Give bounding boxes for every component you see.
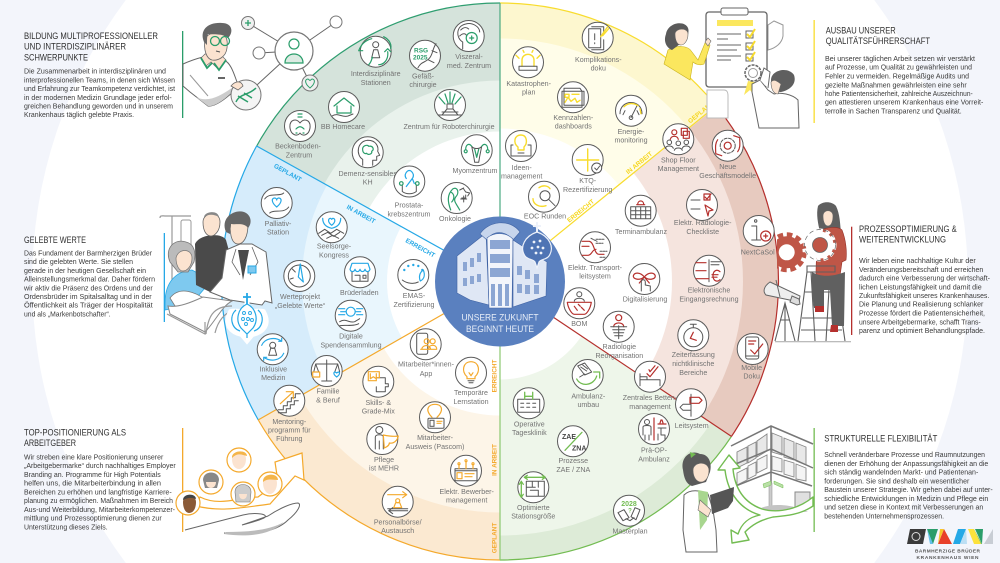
text block: helfen uns, die Mitarbeiterbindung in allen bbox=[24, 479, 161, 488]
text block: parenz und optimiert Behandlungspfade. bbox=[859, 326, 985, 335]
text block: Veränderungsbereitschaft und erreichen bbox=[859, 265, 983, 274]
heading: Top-Positionierung bbox=[24, 427, 126, 449]
icon: Inklusive Medizin: Inklusive bbox=[259, 366, 287, 374]
heading: Prozessoptimierung bbox=[859, 224, 957, 246]
icons of blue sector bbox=[257, 188, 435, 404]
text block: Prozesse fördert die Patientensicherheit, bbox=[859, 309, 985, 318]
icon: Mobile Doku: Doku bbox=[743, 372, 760, 380]
icon: Mentoringprogramm für Führung: Führung bbox=[276, 435, 303, 443]
icon: Elektronisches Transportleitsystem: Elektr. Transport- bbox=[568, 264, 623, 272]
icon: Seelsorge-Kongress: Seelsorge- bbox=[317, 242, 352, 250]
icon: Gefäßchirurgie: 2025 bbox=[413, 55, 428, 62]
text block: und als „Markenbotschafter“. bbox=[24, 310, 111, 318]
text block: Krankenhaus täglich gelebte Praxis. bbox=[24, 110, 134, 119]
icons of orange sector bbox=[268, 329, 495, 535]
icon: Temporäre Lernstation: Lernstation bbox=[453, 398, 489, 406]
text block: Die Planung und Realisierung schlanker bbox=[859, 300, 984, 309]
icon: Prä-OP-Ambulanz bbox=[638, 414, 670, 464]
icon: Prozesse ZAE und ZNA: ZAE / ZNA bbox=[556, 466, 591, 474]
icon: Demenz-sensibles KH: KH bbox=[363, 178, 373, 186]
icon: Interdisziplinäre Stationen bbox=[351, 36, 401, 87]
icon: Terminambulanz bbox=[615, 195, 667, 236]
illustration: building, arrows and woman with tablet bbox=[682, 426, 815, 552]
icon: Katastrophenplan: Katastrophen- bbox=[506, 80, 552, 88]
icon: Optimierte Stationsgröße: Stationsgröße bbox=[511, 512, 555, 520]
icon: EOC Runden bbox=[524, 181, 566, 220]
logo: Barmherzige Brüder Krankenhaus Wien: KRANKENHAUS WIEN bbox=[916, 555, 979, 561]
text block: dadurch eine Verbesserung der wirtschaft- bbox=[859, 274, 990, 283]
icon: Pflege ist MEHR: ist MEHR bbox=[369, 464, 399, 472]
icon: Elektronische Eingangsrechnung bbox=[679, 255, 739, 304]
icon: Zeiterfassung nichtklinische Bereiche bbox=[672, 320, 715, 377]
text block: Branding an. Programme für High Potentials bbox=[24, 470, 161, 479]
text block: Das Fundament der Barmherzigen Brüder bbox=[24, 248, 152, 257]
icon: Zentrum für Roboterchirurgie bbox=[403, 90, 495, 131]
icon: Mitarbeiter*innen-App: Mitarbeiter*innen- bbox=[398, 360, 455, 368]
text block: gerade in der heutigen Gesellschaft ein bbox=[24, 266, 146, 275]
icon: Zentrales Bettenmanagement: Zentrales Betten- bbox=[623, 394, 678, 402]
icon: Personalbörse/Austausch: Personalbörse/ bbox=[374, 518, 422, 526]
ring status labels: ERREICHT bbox=[404, 237, 436, 259]
icon: Operative Tagesklinik: Operative bbox=[514, 420, 545, 428]
icon: Prozesse ZAE und ZNA: Prozesse bbox=[559, 457, 588, 465]
icon: Elektronisches Transportleitsystem bbox=[568, 232, 623, 280]
icon: Ideenmanagement bbox=[501, 130, 542, 180]
text block: und setzen diese in Kontext mit Verbesserungen an bbox=[824, 503, 983, 512]
icon: Werteprojekt Gelebte Werte: Werteprojekt bbox=[280, 293, 320, 301]
ring status labels: IN ARBEIT bbox=[625, 151, 654, 176]
text block: Fehler zu vermeiden. Regelmäßige Audits und bbox=[825, 72, 969, 81]
icons of yellow sector bbox=[501, 22, 648, 221]
illustration: doctor with competence network bbox=[182, 16, 342, 118]
central claim: BEGINNT HEUTE bbox=[466, 323, 534, 334]
icon: Digitale Spendensammlung: Spendensammlung bbox=[320, 342, 382, 350]
text block: planung zu ermöglichen. Maßnahmen im Bereich bbox=[24, 496, 173, 505]
icon: Interdisziplinäre Stationen: Interdisziplinäre bbox=[351, 70, 401, 78]
centre emblem: hospital building bbox=[435, 216, 565, 346]
ring status labels: ERREICHT bbox=[492, 360, 498, 392]
text block: hohe Patientensicherheit, zahlreiche Auszeichnun- bbox=[825, 89, 973, 98]
icon: Shop Floor Management bbox=[658, 124, 699, 173]
icon: EMAS-Zertifizierung bbox=[393, 260, 435, 309]
text block bbox=[24, 67, 176, 119]
heading: Bildung multiprofessioneller bbox=[24, 31, 158, 63]
heading: Ausbau unserer Qualitätsführerschaft: AUSBAU UNSERER bbox=[826, 26, 896, 37]
icon: Radiologie Reorganisation: Reorganisation bbox=[595, 352, 643, 360]
text block bbox=[859, 256, 990, 335]
icon: Mentoringprogramm für Führung bbox=[268, 385, 311, 443]
icon: Ambulanzumbau: Ambulanz- bbox=[571, 392, 606, 400]
icon: Pflege ist MEHR: Pflege bbox=[374, 456, 394, 464]
icon: Gefäßchirurgie: chirurgie bbox=[409, 81, 437, 89]
icon: Shop Floor Management: Shop Floor bbox=[661, 156, 696, 164]
icon: Operative Tagesklinik: Tagesklinik bbox=[512, 429, 547, 437]
icon: BB Homecare bbox=[321, 92, 365, 131]
icon: Masterplan: Masterplan bbox=[612, 528, 648, 536]
icon: Ideenmanagement: Ideen- bbox=[512, 164, 532, 172]
icon: Elektronisches Transportleitsystem: leitsystem bbox=[579, 272, 611, 280]
icon: Demenz-sensibles KH: Demenz-sensibles bbox=[339, 170, 397, 178]
icon: Mitarbeiter-Ausweis (Pascom) bbox=[406, 402, 464, 451]
logo: Barmherzige Brüder Krankenhaus Wien bbox=[907, 529, 993, 561]
icon: Elektronisches Bewerbermanagement: management bbox=[446, 496, 487, 504]
icon: Mitarbeiter*innen-App: App bbox=[420, 370, 432, 378]
icon: BB Homecare: BB Homecare bbox=[321, 123, 365, 131]
ring status labels: IN ARBEIT bbox=[492, 444, 498, 476]
panel: text, multiprofessional focus bbox=[24, 31, 176, 119]
icon: Zentrales Bettenmanagement bbox=[623, 361, 678, 411]
icon: Komplikationsdoku: Komplikations- bbox=[575, 56, 622, 64]
icon: Shop Floor Management: Management bbox=[658, 165, 699, 173]
icon: Ideenmanagement: management bbox=[501, 172, 542, 180]
central claim bbox=[462, 312, 539, 334]
text block: sich ständig wandelnden Markt- und Patientenan- bbox=[824, 468, 979, 477]
text block: wir aktiv die Präsenz des Ordens und der bbox=[23, 283, 153, 292]
icon: Brüderladen bbox=[340, 257, 379, 297]
panel: yellow sector, quality leadership bbox=[500, 2, 706, 184]
icon: Prostatakrebszentrum bbox=[388, 166, 431, 218]
icon: Neue Geschäftsmodelle: Neue bbox=[719, 163, 736, 171]
icon: Seelsorge-Kongress: Kongress bbox=[319, 252, 349, 260]
text block: „Arbeitgebermarke“ durch nachhaltiges Employer bbox=[24, 461, 176, 470]
icon: Skills- und Grade-Mix bbox=[362, 366, 395, 416]
heading: Prozessoptimierung: WEITERENTWICKLUNG bbox=[859, 235, 946, 246]
icons of green sector bbox=[275, 20, 498, 223]
panel: text, lived values bbox=[23, 235, 155, 318]
icon: Viszeralmedizinisches Zentrum: Viszeral- bbox=[455, 53, 483, 61]
icon: Masterplan bbox=[612, 495, 648, 536]
icon: BOM: BOM bbox=[571, 320, 587, 328]
central claim: UNSERE ZUKUNFT bbox=[462, 312, 539, 322]
icon: Skills- und Grade-Mix: Skills- & bbox=[365, 399, 391, 407]
icon: Optimierte Stationsgröße bbox=[511, 472, 555, 520]
icon: Kennzahlendashboards: Kennzahlen- bbox=[553, 114, 594, 122]
icon: Werteprojekt Gelebte Werte bbox=[275, 260, 326, 310]
icon: Kennzahlendashboards: dashboards bbox=[555, 122, 592, 130]
icon: Leitsystem: Leitsystem bbox=[675, 422, 709, 430]
icon: Werteprojekt Gelebte Werte: „Gelebte Werte“ bbox=[275, 302, 326, 310]
icon: Skills- und Grade-Mix: Grade-Mix bbox=[362, 408, 395, 416]
panel: red sector, process optimisation bbox=[634, 114, 780, 437]
icon: Digitalisierung: Digitalisierung bbox=[623, 296, 667, 304]
icon: Masterplan: 2028 bbox=[621, 501, 637, 508]
icon: Myomzentrum: Myomzentrum bbox=[453, 167, 498, 175]
heading: Top-Positionierung: TOP-POSITIONIERUNG ALS bbox=[24, 427, 126, 438]
ring status labels: ERREICHT bbox=[566, 198, 596, 224]
icon: Familie und Beruf: Familie bbox=[317, 388, 339, 396]
icon: Digitalisierung bbox=[623, 264, 667, 304]
icon: Mobile Doku: Mobile bbox=[741, 364, 762, 372]
text block: gen attestieren unserem Krankenhaus eine Vorreit- bbox=[825, 98, 984, 107]
text block: terrolle in Sachen Transparenz und Qualität. bbox=[825, 107, 962, 116]
icon: Prozesse ZAE und ZNA bbox=[556, 426, 591, 474]
icon: Elektronische Eingangsrechnung: Eingangsrechnung bbox=[679, 296, 739, 304]
icon: Terminambulanz: Terminambulanz bbox=[615, 228, 667, 236]
icon: Familie und Beruf bbox=[311, 356, 342, 404]
text block: Die Zusammenarbeit in interdisziplinären und bbox=[24, 67, 166, 76]
text block: dienen der Erhöhung der Anpassungsfähigkeit an die bbox=[824, 459, 988, 468]
icon: Digitale Spendensammlung: Digitale bbox=[339, 332, 363, 340]
ring status labels: GEPLANT bbox=[272, 163, 303, 184]
icon: EMAS-Zertifizierung: EMAS- bbox=[403, 292, 426, 300]
icon: Prozesse ZAE und ZNA: ZAE bbox=[562, 434, 576, 441]
icon: Palliativ-Station bbox=[261, 188, 292, 236]
icon: EMAS-Zertifizierung: Zertifizierung bbox=[393, 301, 435, 309]
icon: Ambulanzumbau: umbau bbox=[577, 401, 599, 409]
icon: Radiologie Reorganisation: Radiologie bbox=[603, 343, 636, 351]
text block: Bei unserer täglichen Arbeit setzen wir verstärkt bbox=[825, 54, 976, 63]
text block bbox=[23, 248, 155, 318]
icon: Mitarbeiter*innen-App bbox=[398, 329, 455, 378]
icon: Neue Geschäftsmodelle: Geschäftsmodelle bbox=[699, 172, 756, 180]
icon: Viszeralmedizinisches Zentrum bbox=[447, 20, 491, 70]
icon: Viszeralmedizinisches Zentrum: med. Zentrum bbox=[447, 62, 491, 70]
icon: Personalbörse/Austausch bbox=[374, 486, 422, 535]
ring status labels bbox=[272, 100, 715, 553]
icon: Beckenboden-Zentrum: Zentrum bbox=[286, 152, 312, 160]
icon: Prostatakrebszentrum: krebszentrum bbox=[388, 210, 431, 218]
icon: Inklusive Medizin: Medizin bbox=[261, 374, 286, 382]
icon: Temporäre Lernstation: Temporäre bbox=[454, 389, 488, 397]
heading: Gelebte Werte: GELEBTE WERTE bbox=[24, 235, 86, 246]
icon: Elektronische Eingangsrechnung: Elektronische bbox=[688, 286, 730, 294]
text block: Zukunftsfähigkeit unseres Krankenhauses. bbox=[859, 291, 989, 300]
icon: Energiemonitoring: monitoring bbox=[614, 136, 648, 144]
icon: Gefäßchirurgie: RSG bbox=[414, 48, 428, 55]
icon: Elektronische Radiologie-Checkliste: Checkliste bbox=[686, 228, 719, 236]
icon: KTQ-Rezertifizierung bbox=[563, 144, 612, 194]
panel: blue sector, lived values bbox=[221, 146, 402, 420]
icon: Interdisziplinäre Stationen: Stationen bbox=[361, 79, 391, 87]
heading: Bildung multiprofessioneller: BILDUNG MULTIPROFESSIONELLER bbox=[24, 31, 158, 42]
panel: orange sector, employer positioning bbox=[258, 348, 500, 561]
icon: Elektronische Radiologie-Checkliste bbox=[674, 190, 732, 236]
icon: Pflege ist MEHR bbox=[367, 424, 399, 472]
text block: Schnell veränderbare Prozesse und Raumnutzungen bbox=[824, 450, 985, 459]
icon: Myomzentrum bbox=[453, 135, 498, 175]
panel: light green sector, structural flexibility bbox=[500, 336, 732, 561]
text block: bestehenden Unternehmensprozessen. bbox=[824, 511, 944, 520]
text block bbox=[824, 450, 993, 520]
text block: Bereichen zu erhöhen und langfristige Karriere- bbox=[24, 487, 172, 496]
icon: Ambulanzumbau bbox=[571, 360, 606, 409]
icon: Komplikationsdoku bbox=[575, 22, 622, 72]
icon: Elektronische Radiologie-Checkliste: Elektr. Radiologie- bbox=[674, 219, 732, 227]
icon: Gefäßchirurgie: Gefäß- bbox=[412, 72, 435, 80]
panel: text, quality leadership bbox=[825, 26, 984, 116]
icon: Neue Geschäftsmodelle bbox=[699, 130, 756, 180]
text block bbox=[24, 452, 176, 531]
sector dividers bbox=[257, 3, 731, 560]
icon: Digitale Spendensammlung bbox=[320, 300, 382, 350]
text block: Wir leben eine nachhaltige Kultur der bbox=[859, 256, 976, 265]
text block: forderungen. Sie sind deshalb ein wesentlicher bbox=[824, 476, 970, 485]
text block: und Erfahrung zur Teamkompetenz verdichtet, ist bbox=[24, 84, 176, 93]
icon: Masterplan: ? bbox=[628, 509, 632, 515]
icon: Beckenboden-Zentrum: Beckenboden- bbox=[275, 142, 322, 150]
icon: Personalbörse/Austausch: Austausch bbox=[381, 527, 414, 535]
icon: Energiemonitoring bbox=[614, 95, 648, 144]
text block: Wir streben eine klare Positionierung unserer bbox=[24, 452, 164, 461]
icon: Prozesse ZAE und ZNA: ZNA bbox=[572, 445, 586, 452]
text block: Aus-und Weiterbildung, Mitarbeiterkompetenzer- bbox=[24, 505, 175, 514]
text block: schiedliche Entwicklungen in Medizin und Pflege ein bbox=[824, 494, 988, 503]
icons of red sector bbox=[564, 124, 775, 381]
icon: Zeiterfassung nichtklinische Bereiche: nichtklinische bbox=[672, 360, 714, 368]
text block: Alleinstellungsmerkmal dar. Daher fördern bbox=[24, 275, 155, 284]
text block: greichen Behandlung geworden und in unserem bbox=[24, 102, 173, 110]
panel: text, employer positioning bbox=[24, 427, 176, 531]
text block: unsere Arbeitgebermarke, schafft Trans- bbox=[859, 317, 981, 326]
icon: Prä-OP-Ambulanz: Prä-OP- bbox=[641, 446, 668, 454]
text block: sind die gelebten Werte. Sie stellen bbox=[24, 257, 133, 266]
heading: Ausbau unserer Qualitätsführerschaft bbox=[826, 26, 930, 47]
text block: lichen Leistungsfähigkeit und damit die bbox=[859, 282, 982, 291]
heading: Prozessoptimierung: PROZESSOPTIMIERUNG & bbox=[859, 224, 957, 235]
icon: Zentrum für Roboterchirurgie: Zentrum für Roboterchirurgie bbox=[403, 123, 495, 131]
ring status labels: IN ARBEIT bbox=[345, 204, 376, 225]
icon: Radiologie Reorganisation bbox=[595, 311, 643, 360]
icon: BOM bbox=[564, 288, 595, 328]
illustration: quality checklist with two people bbox=[664, 8, 815, 128]
icon: Familie und Beruf: & Beruf bbox=[316, 396, 340, 404]
icon: Energiemonitoring: Energie- bbox=[618, 128, 645, 136]
panel: green sector, interdisciplinary centres bbox=[256, 2, 500, 208]
icon: Brüderladen: Brüderladen bbox=[340, 289, 379, 297]
text block: Ordensbrüder im Spitalsalltag und in der bbox=[24, 292, 152, 301]
icon: Katastrophenplan bbox=[506, 47, 552, 96]
icon: Operative Tagesklinik bbox=[512, 388, 547, 437]
icon: Zentrales Bettenmanagement: management bbox=[629, 403, 671, 411]
icon: Kennzahlendashboards bbox=[553, 82, 594, 130]
icon: Mitarbeiter-Ausweis (Pascom): Ausweis (Pascom) bbox=[406, 443, 464, 451]
ring status labels: GEPLANT bbox=[687, 100, 715, 125]
icon: Mobile Doku bbox=[737, 334, 768, 380]
icon: Zeiterfassung nichtklinische Bereiche: Bereiche bbox=[679, 369, 707, 377]
icon: Onkologie bbox=[439, 182, 472, 223]
icon: Komplikationsdoku: doku bbox=[591, 64, 606, 72]
text block: auf Prozesse, um Qualität zu gewährleisten und bbox=[825, 63, 972, 72]
text block bbox=[825, 54, 984, 116]
illustration: career path with hand bbox=[176, 428, 304, 535]
icon: Mitarbeiter-Ausweis (Pascom): Mitarbeiter- bbox=[417, 434, 454, 442]
illustration: woman with gears on a ladder bbox=[764, 202, 852, 342]
logo: Barmherzige Brüder Krankenhaus Wien: BARMHERZIGE BRÜDER bbox=[915, 548, 981, 554]
heading: Bildung multiprofessioneller: SCHWERPUNKTE bbox=[24, 52, 88, 63]
icon: KTQ-Rezertifizierung: Rezertifizierung bbox=[563, 186, 612, 194]
icon: Elektronisches Bewerbermanagement bbox=[439, 455, 495, 504]
panel: text, process optimisation bbox=[859, 224, 990, 335]
panel: text, structural flexibility bbox=[824, 434, 993, 520]
icon: Beckenboden-Zentrum bbox=[275, 110, 322, 160]
text block: Öffentlichkeit als Träger der Hospitalität bbox=[24, 301, 154, 310]
icon: Onkologie: Onkologie bbox=[439, 215, 471, 223]
text block: gezielte Maßnahmen gewährleisten eine sehr bbox=[825, 80, 967, 89]
icon: Mentoringprogramm für Führung: Mentoring- bbox=[272, 418, 307, 426]
heading: Ausbau unserer Qualitätsführerschaft: QUALITÄTSFÜHRERSCHAFT bbox=[826, 36, 930, 47]
icons of light green sector bbox=[511, 360, 709, 536]
heading: Top-Positionierung: ARBEITGEBER bbox=[24, 438, 76, 449]
icon: Optimierte Stationsgröße: Optimierte bbox=[517, 504, 550, 512]
icon: Palliativ-Station: Station bbox=[267, 228, 289, 236]
heading: Strukturelle Flexibilität: STRUKTURELLE FLEXIBILITÄT bbox=[824, 434, 937, 445]
illustration: patient, monk and doctor bbox=[160, 211, 272, 340]
icon: Seelsorge-Kongress bbox=[316, 212, 352, 260]
icon: EOC Runden: EOC Runden bbox=[524, 212, 566, 220]
icon: Elektronisches Bewerbermanagement: Elektr. Bewerber- bbox=[439, 488, 495, 496]
icon: Gefäßchirurgie bbox=[409, 40, 440, 89]
heading: Bildung multiprofessioneller: UND INTERDISZIPLINÄRER bbox=[24, 42, 126, 53]
icon: Demenz-sensibles KH bbox=[339, 137, 397, 186]
text block: interprofessionellen Teams, in denen sich Wissen bbox=[24, 75, 175, 84]
icon: Leitsystem bbox=[675, 389, 709, 430]
icon: Inklusive Medizin bbox=[257, 334, 288, 382]
ring status labels: GEPLANT bbox=[492, 523, 498, 553]
icon: NextCaSol: NextCaSol bbox=[741, 248, 775, 256]
icon: Prä-OP-Ambulanz: Ambulanz bbox=[638, 456, 670, 464]
icon: KTQ-Rezertifizierung: KTQ- bbox=[579, 177, 597, 185]
text block: in der modernen Medizin Grundlage jeder erfol- bbox=[24, 93, 172, 102]
icon: Palliativ-Station: Palliativ- bbox=[265, 220, 292, 228]
text block: mittlung und Prozessoptimierung dienen zur bbox=[24, 514, 162, 523]
icon: Prostatakrebszentrum: Prostata- bbox=[395, 202, 424, 210]
text block: Unterstützung dieses Ziels. bbox=[24, 522, 108, 531]
icon: Zeiterfassung nichtklinische Bereiche: Zeiterfassung bbox=[672, 351, 715, 359]
icon: Temporäre Lernstation bbox=[453, 357, 489, 406]
icon: Katastrophenplan: plan bbox=[522, 88, 535, 96]
icon: NextCaSol bbox=[741, 216, 775, 256]
icon: Mentoringprogramm für Führung: programm für bbox=[268, 426, 311, 434]
